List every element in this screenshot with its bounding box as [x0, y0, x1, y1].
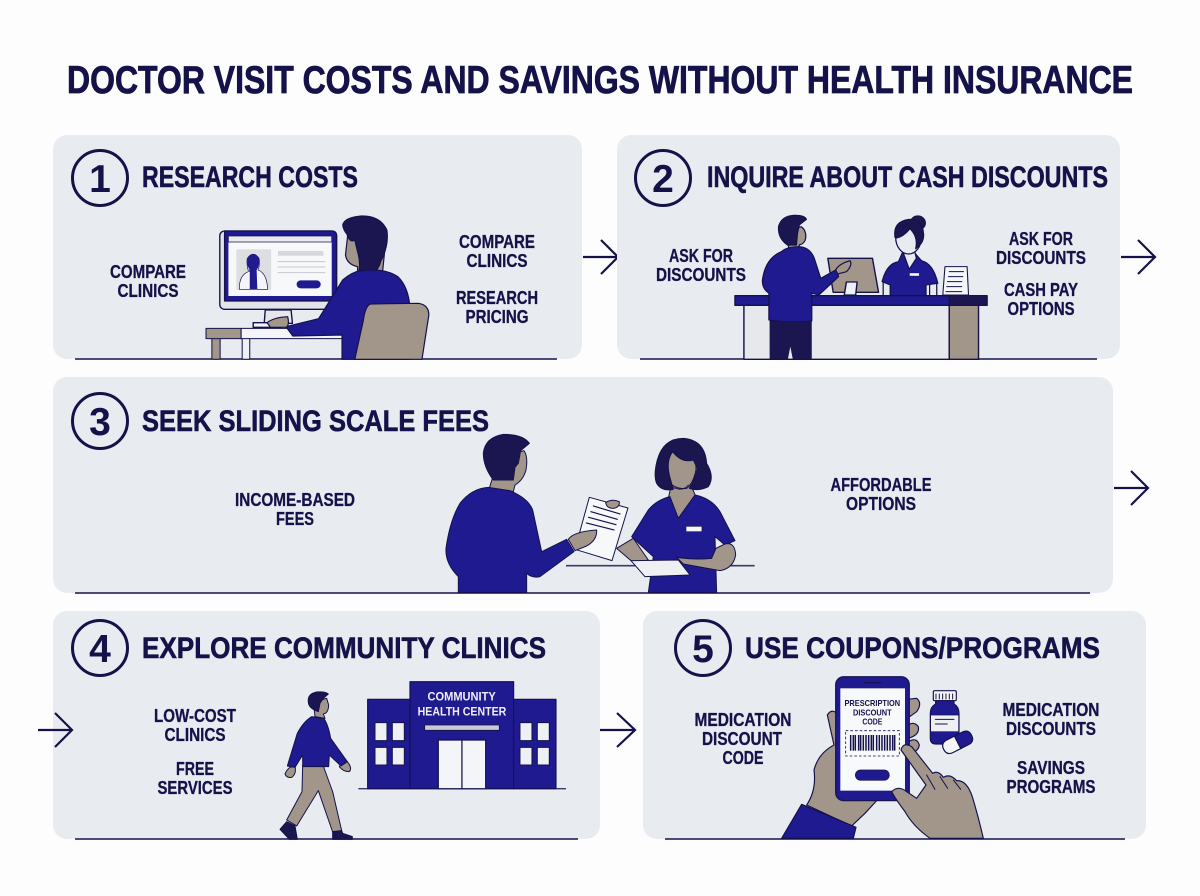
- panel: step 5 use coupons and programs: [643, 611, 1146, 839]
- heading: use coupons/programs: USE COUPONS/PROGRAMS: [745, 632, 1100, 665]
- arrow into step 4: [38, 713, 72, 747]
- building sign: COMMUNITY: [427, 690, 496, 704]
- desk: [206, 328, 343, 359]
- label: low-cost clinics: [154, 705, 237, 745]
- label: income-based fees: INCOME-BASED: [235, 489, 355, 510]
- form: [575, 497, 628, 561]
- illustration: patient handing form to staff: [446, 434, 755, 593]
- label: compare clinics left: CLINICS: [118, 280, 178, 301]
- label: cash pay options: [1004, 279, 1079, 319]
- label: affordable options: AFFORDABLE: [830, 474, 932, 495]
- label: research pricing: [456, 287, 538, 327]
- label: compare clinics left: COMPARE: [110, 261, 186, 282]
- label: research pricing: PRICING: [466, 306, 528, 327]
- label: ask for discounts right: DISCOUNTS: [996, 247, 1086, 268]
- phone coupon text: CODE: [862, 717, 883, 727]
- label: affordable options: [830, 474, 932, 514]
- label: compare clinics right: COMPARE: [459, 231, 535, 252]
- label: cash pay options: CASH PAY: [1004, 279, 1079, 300]
- label: low-cost clinics: LOW-COST: [154, 705, 237, 726]
- phone coupon text: DISCOUNT: [853, 707, 892, 717]
- illustration: person at computer: [206, 216, 429, 359]
- label: medication discounts: [1002, 699, 1100, 739]
- step number 3: 3: [89, 401, 111, 444]
- phone: [836, 677, 909, 801]
- step number 3: [72, 394, 128, 448]
- label: research pricing: RESEARCH: [456, 287, 538, 308]
- illustration: walking person: [280, 692, 352, 839]
- label: medication discount code: CODE: [722, 747, 764, 768]
- label: income-based fees: [235, 489, 355, 529]
- label: ask for discounts left: ASK FOR: [669, 245, 733, 266]
- label: ask for discounts right: [996, 228, 1086, 268]
- label: savings programs: PROGRAMS: [1006, 776, 1096, 797]
- patient: [446, 434, 597, 593]
- heading: explore community clinics: EXPLORE COMMUNITY CLINICS: [142, 632, 546, 665]
- phone coupon text: [844, 698, 900, 727]
- step number 5: [676, 620, 730, 676]
- building sign: HEALTH CENTER: [418, 704, 507, 718]
- left hand: [782, 698, 920, 838]
- step number 2: 2: [652, 158, 674, 201]
- label: ask for discounts left: [656, 245, 746, 285]
- label: compare clinics left: [110, 261, 186, 301]
- building sign: [418, 690, 507, 718]
- label: free services: FREE: [176, 758, 214, 779]
- step number 1: 1: [89, 158, 111, 201]
- panel: step 4 explore community clinics: [53, 611, 600, 839]
- label: ask for discounts right: ASK FOR: [1009, 228, 1073, 249]
- label: medication discount code: DISCOUNT: [702, 728, 783, 749]
- illustration: hands holding phone with discount code: [782, 677, 983, 838]
- label: savings programs: SAVINGS: [1017, 757, 1085, 778]
- illustration: reception desk: [735, 215, 987, 359]
- capsule: [941, 729, 975, 756]
- arrow 4 to 5: [600, 713, 635, 747]
- heading: seek sliding scale fees: SEEK SLIDING SCALE FEES: [142, 405, 489, 438]
- label: medication discounts: DISCOUNTS: [1006, 718, 1096, 739]
- phone coupon text: PRESCRIPTION: [844, 698, 900, 708]
- label: savings programs: [1006, 757, 1096, 797]
- label: cash pay options: OPTIONS: [1008, 298, 1074, 319]
- step number 5: 5: [692, 628, 714, 671]
- label: medication discount code: [694, 709, 792, 768]
- arrow 2 to 3: [1121, 240, 1155, 274]
- label: free services: [158, 758, 232, 798]
- panel: step 3 seek sliding scale fees: [53, 377, 1113, 593]
- receptionist: [882, 216, 938, 297]
- arrow 3 to 4: [1114, 471, 1148, 505]
- heading: research costs: RESEARCH COSTS: [142, 161, 358, 194]
- label: free services: SERVICES: [158, 777, 232, 798]
- right hand: [892, 745, 983, 838]
- pill bottle: [930, 691, 959, 744]
- arrow 1 to 2: [583, 240, 618, 274]
- label: affordable options: OPTIONS: [846, 493, 916, 514]
- illustration: community health center: [358, 682, 566, 789]
- label: compare clinics right: CLINICS: [466, 250, 528, 271]
- label: ask for discounts left: DISCOUNTS: [656, 264, 746, 285]
- label: compare clinics right: [459, 231, 535, 271]
- staff: [617, 438, 736, 593]
- sign: [943, 267, 969, 295]
- label: medication discounts: MEDICATION: [1002, 699, 1100, 720]
- panel: step 1 research costs: [53, 135, 582, 359]
- person: [267, 216, 429, 359]
- step number 4: [72, 620, 128, 676]
- label: low-cost clinics: CLINICS: [164, 724, 226, 745]
- counter: [735, 296, 987, 359]
- customer: [762, 215, 851, 359]
- monitor: [220, 231, 337, 327]
- step number 2: [636, 150, 690, 206]
- monitor: [828, 258, 879, 295]
- panel: step 2 inquire about cash discounts: [617, 135, 1120, 359]
- barcode: [846, 731, 899, 756]
- label: medication discount code: MEDICATION: [694, 709, 792, 730]
- step number 4: 4: [89, 628, 111, 671]
- phone button: [855, 770, 889, 780]
- label: income-based fees: FEES: [276, 508, 314, 529]
- step number 1: [72, 150, 128, 206]
